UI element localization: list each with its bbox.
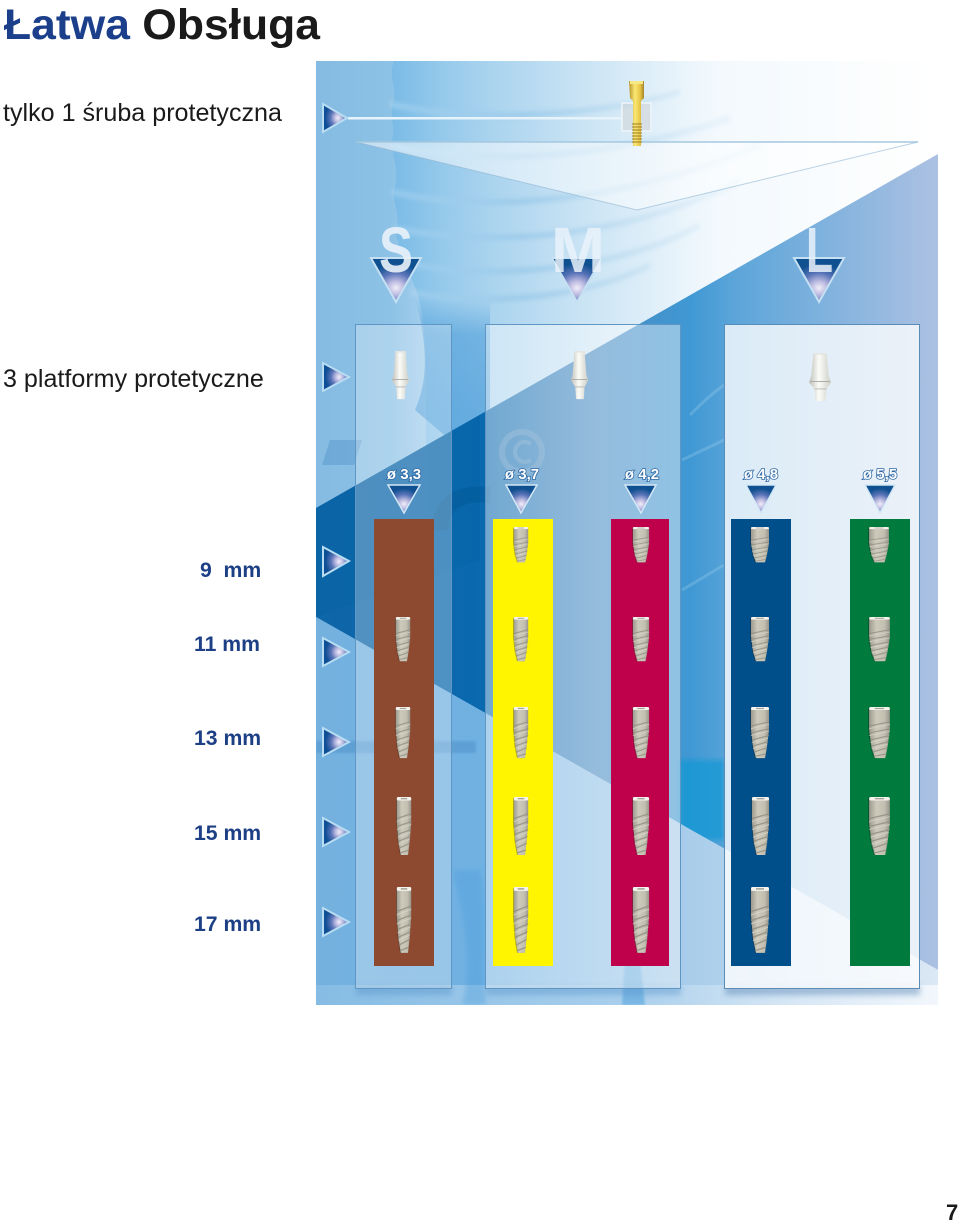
implant 3,7 x 13 — [513, 707, 528, 758]
implant 4,2 x 15 — [632, 797, 649, 855]
panel: product picture — [316, 61, 938, 1005]
diameter 5,5: ø 5,5 — [863, 466, 897, 483]
arrow 3,3 — [388, 485, 420, 513]
icon: down arrow L — [794, 258, 844, 302]
implant 4,8 x 13 — [750, 707, 769, 758]
marker: 9 mm row — [323, 547, 349, 576]
lower diagonal band — [316, 617, 938, 1005]
diameter 3,3: ø 3,3 — [387, 466, 421, 483]
implant 4,2 x 9 — [632, 527, 649, 562]
arrow 5,5 — [865, 485, 895, 513]
implant 4,2 x 11 — [632, 617, 649, 661]
marker: 11 mm row — [323, 638, 349, 666]
length labels — [194, 559, 261, 936]
arrow 4,2 — [625, 485, 656, 513]
arrow 3,7 — [506, 485, 537, 513]
panel: size L — [724, 324, 920, 988]
abutment L — [809, 353, 831, 401]
arrow 4,8 — [746, 485, 776, 513]
label: 9 mm: 9 mm — [200, 559, 261, 582]
marker: 17 mm row — [323, 908, 349, 936]
top connector triangle — [356, 142, 918, 210]
implant 4,2 x 17 — [632, 887, 649, 953]
arrow markers — [323, 104, 349, 936]
title: Łatwa Obsługa — [4, 1, 321, 49]
bar: blue 4,8 — [731, 519, 791, 966]
implant 3,7 x 15 — [513, 797, 528, 855]
label: 13 mm: 13 mm — [194, 727, 261, 750]
label: 15 mm: 15 mm — [194, 822, 261, 845]
implant 3,7 x 9 — [513, 527, 528, 562]
implant 4,8 x 17 — [750, 887, 769, 953]
icon: down arrow S — [371, 258, 421, 302]
mid diagonal band — [316, 154, 938, 970]
text: three prosthetic platforms: 3 platformy protetyczne — [3, 365, 264, 393]
bar: yellow 3,7 — [493, 519, 553, 966]
text: one prosthetic screw: tylko 1 śruba protetyczna — [3, 99, 282, 127]
icon: down arrow M — [552, 258, 602, 302]
abutment S — [392, 351, 409, 399]
marker: platform row — [323, 363, 349, 391]
abutment M — [571, 351, 588, 399]
screw highlight box — [622, 103, 651, 131]
diameter 4,2: ø 4,2 — [625, 466, 659, 483]
panel: size S — [356, 324, 452, 988]
bar: green 5,5 — [850, 519, 910, 966]
bar: brown 3,3 — [374, 519, 434, 966]
heading: S: S — [379, 214, 413, 286]
implant 5,5 x 13 — [868, 707, 890, 758]
bar: crimson 4,2 — [611, 519, 669, 966]
implant 5,5 x 9 — [868, 527, 889, 562]
implant 5,5 x 11 — [868, 617, 890, 661]
connector line to screw — [348, 117, 623, 120]
implant 4,2 x 13 — [632, 707, 649, 758]
diameter 4,8: ø 4,8 — [744, 466, 778, 483]
implant 3,7 x 11 — [513, 617, 528, 661]
marker: screw row — [323, 104, 347, 132]
implant 4,8 x 11 — [750, 617, 769, 661]
implant 3,3 x 11 — [395, 617, 410, 661]
heading: M: M — [551, 214, 605, 286]
marker: 13 mm row — [323, 728, 349, 756]
implant 4,8 x 15 — [751, 797, 769, 855]
panel: size M — [486, 324, 680, 988]
implant 3,3 x 17 — [396, 887, 411, 953]
implant 4,8 x 9 — [750, 527, 769, 562]
picture background — [316, 61, 938, 1005]
implant 3,7 x 17 — [513, 887, 528, 953]
heading: L: L — [806, 214, 833, 286]
label: 11 mm: 11 mm — [194, 633, 260, 656]
implant 3,3 x 13 — [395, 707, 410, 758]
diameter arrows — [388, 485, 895, 513]
implant 5,5 x 15 — [868, 797, 890, 855]
label: 17 mm: 17 mm — [194, 913, 261, 936]
icon: gold prosthetic screw — [629, 81, 644, 146]
implant 3,3 x 15 — [396, 797, 411, 855]
diameter 3,7: ø 3,7 — [505, 466, 539, 483]
marker: 15 mm row — [323, 818, 349, 846]
diameter labels — [387, 466, 897, 483]
